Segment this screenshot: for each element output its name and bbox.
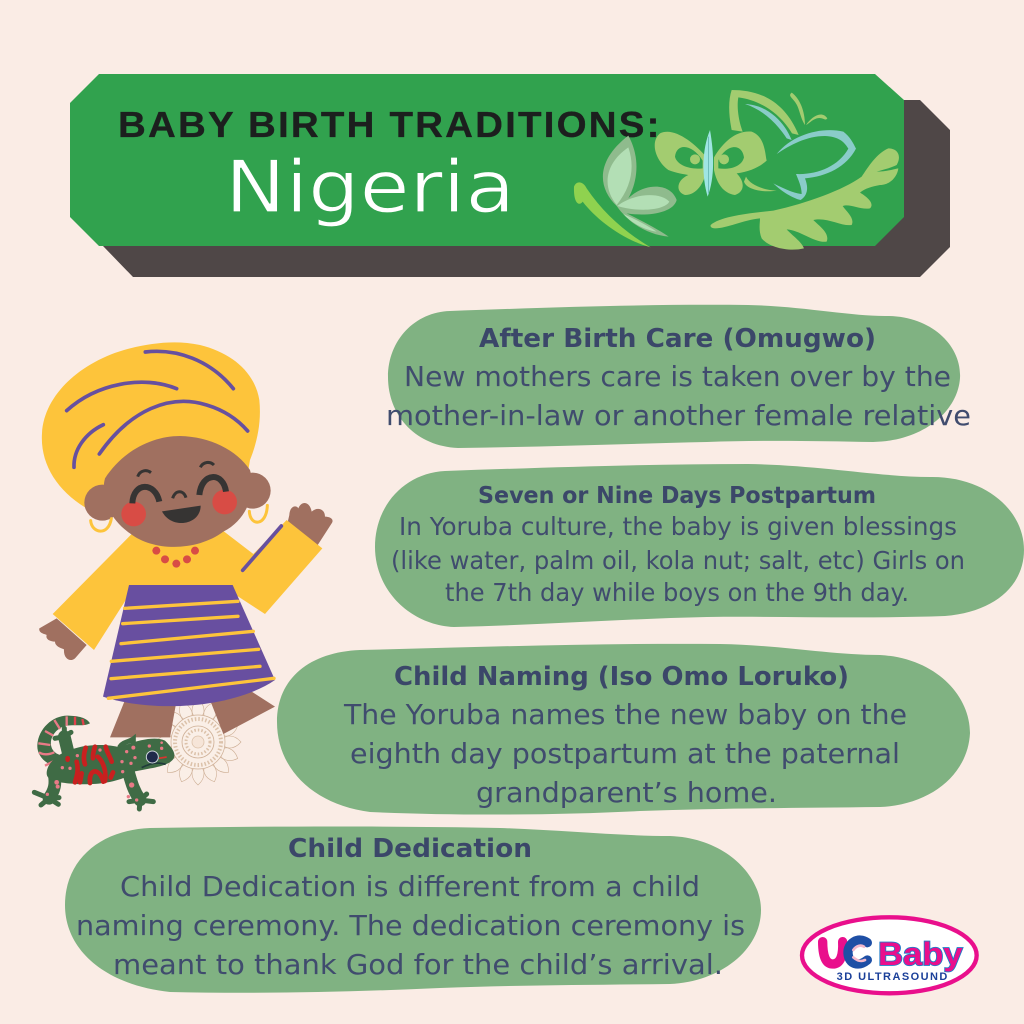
body text: naming ceremony. The dedication ceremony is [76, 909, 745, 942]
banner shadow [103, 100, 950, 277]
gecko spots [46, 741, 163, 802]
panel: child dedication [65, 826, 761, 993]
body text: The Yoruba names the new baby on the [343, 698, 907, 731]
decoration: butterflies and leaf [574, 90, 899, 250]
body text: (like water, palm oil, kola nut; salt, etc) Girls on [391, 546, 965, 575]
body text [343, 698, 907, 809]
gecko mouth [142, 763, 166, 768]
logo letters UC [823, 940, 867, 964]
cheeks [121, 502, 146, 526]
title line: BABY BIRTH TRADITIONS: [118, 104, 659, 145]
body text [76, 870, 745, 981]
gecko body [47, 739, 174, 784]
icon: monstera leaf [711, 148, 899, 250]
banner green plate [70, 74, 904, 246]
gecko eye [146, 751, 158, 763]
body text [391, 512, 965, 607]
body text [386, 360, 971, 432]
heading: Child Dedication [288, 834, 532, 864]
logo word Baby: Baby [878, 936, 963, 972]
ears [84, 485, 120, 521]
body text: Child Dedication is different from a child [120, 870, 700, 903]
right hand [287, 503, 333, 547]
panel shape [375, 464, 1024, 627]
sleeve line [243, 526, 281, 570]
icon: centre butterfly [655, 130, 767, 197]
panel: seven or nine days postpartum [375, 464, 1024, 627]
body text: mother-in-law or another female relative [386, 399, 971, 432]
eyes and features [132, 462, 226, 503]
gecko red markings [68, 747, 113, 783]
logo oval [802, 917, 977, 993]
title country: Nigeria [225, 145, 515, 229]
body text: meant to thank God for the child’s arrival. [113, 948, 723, 981]
body text: New mothers care is taken over by the [404, 360, 951, 393]
skirt stripes [108, 601, 274, 698]
icon: outlined butterfly [729, 90, 856, 200]
skirt [103, 585, 275, 706]
illustration: smiling woman in headwrap [39, 342, 333, 737]
panel: after birth care [386, 305, 971, 448]
icon: pale butterfly [574, 136, 677, 247]
panel shape [388, 305, 960, 448]
earrings [91, 505, 267, 531]
heading: Seven or Nine Days Postpartum [478, 483, 876, 509]
panel: child naming [277, 644, 970, 815]
gecko toes and hump [34, 728, 153, 809]
illustration: gecko [34, 716, 174, 809]
body text: the 7th day while boys on the 9th day. [445, 578, 909, 607]
gecko legs [49, 737, 140, 800]
panel shape [277, 644, 970, 815]
body text: grandparent’s home. [476, 776, 777, 809]
illustration: mandala [155, 699, 241, 785]
body text: In Yoruba culture, the baby is given blessings [399, 512, 957, 541]
legs [110, 692, 275, 737]
logo: UC Baby 3D Ultrasound [802, 917, 977, 993]
left hand [39, 618, 87, 660]
blouse [53, 520, 322, 650]
turban folds [67, 351, 248, 467]
gecko tongue [159, 757, 167, 758]
gecko tail [37, 716, 90, 767]
title banner [70, 74, 950, 277]
logo tagline: 3D ULTRASOUND [837, 971, 947, 983]
face [104, 436, 252, 547]
necklace [152, 547, 199, 568]
body text: eighth day postpartum at the paternal [350, 737, 900, 770]
turban [42, 342, 260, 510]
heading: Child Naming (Iso Omo Loruko) [394, 662, 849, 692]
heading: After Birth Care (Omugwo) [479, 324, 876, 354]
panel shape [65, 826, 761, 993]
mouth [162, 506, 201, 523]
gecko tail stripes [38, 716, 84, 766]
